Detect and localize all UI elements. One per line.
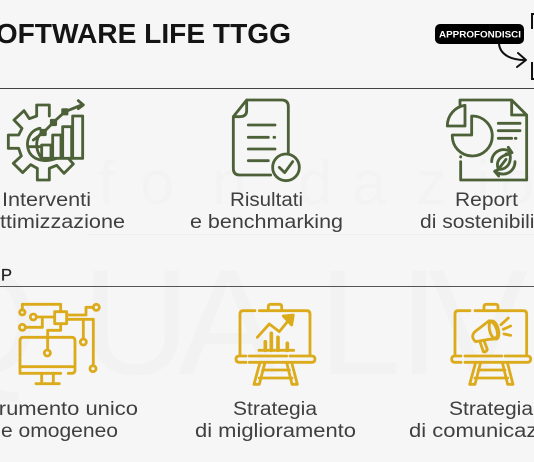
label: strategia di comunicazione: Strategia (449, 399, 533, 420)
label: strategia di miglioramento: Strategia (233, 399, 317, 420)
section heading: P (1, 266, 12, 284)
label: interventi ottimizzazione (0, 190, 125, 233)
section divider faint (88, 234, 534, 235)
label: report di sostenibilita: Report (455, 190, 519, 211)
label: report di sostenibilita (420, 190, 534, 233)
top divider (0, 88, 534, 89)
label: strategia di miglioramento (195, 399, 356, 442)
label: risultati e benchmarking: e benchmarking (190, 212, 343, 233)
arrow: callout to brackets (499, 44, 526, 67)
icon: document with check (233, 100, 299, 181)
callout: approfondisci (435, 24, 524, 44)
label: strumento unico e omogeneo: e omogeneo (1, 421, 118, 442)
label: interventi ottimizzazione: Interventi (2, 190, 91, 211)
icon: easel with growth chart (236, 304, 315, 384)
lower divider (0, 286, 534, 287)
label: strategia di miglioramento: di miglioramento (195, 421, 356, 442)
label: strumento unico e omogeneo (0, 399, 138, 442)
bracket: bottom (532, 62, 534, 79)
bracket: top (532, 14, 534, 29)
callout: approfondisci: APPROFONDISCI (439, 30, 521, 40)
icon: easel with megaphone (452, 304, 531, 384)
icon: gear with growth chart (8, 101, 83, 180)
label: risultati e benchmarking (190, 190, 343, 233)
icon: sustainability report (447, 100, 527, 180)
label: risultati e benchmarking: Risultati (230, 190, 303, 211)
label: strategia di comunicazione (409, 399, 534, 442)
icon: circuit monitor (19, 304, 99, 384)
